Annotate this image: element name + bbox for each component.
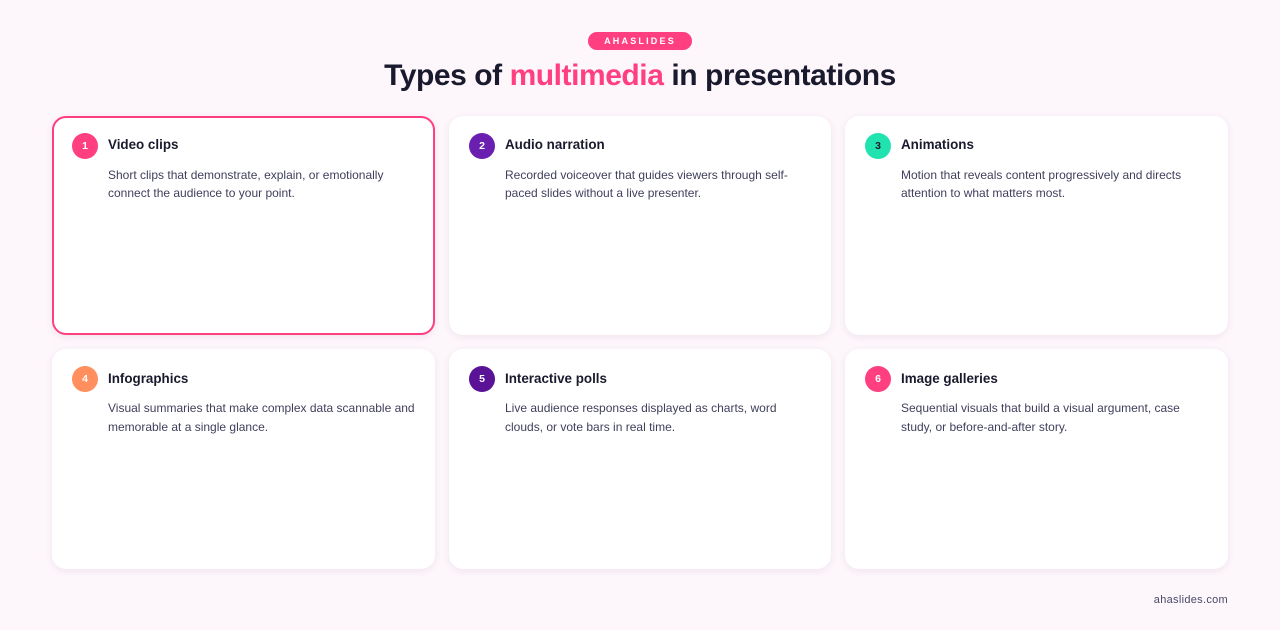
text: infographics description: Visual summaries that make complex data scannable and <box>108 400 415 414</box>
number badge 6 <box>865 366 891 392</box>
number badge 6: 6 <box>875 373 881 385</box>
panel: infographics <box>52 349 435 569</box>
number badge 5 <box>469 366 495 392</box>
heading: image galleries: Image galleries <box>901 371 998 386</box>
text: audio narration description: paced slides without a live presenter. <box>505 186 701 200</box>
text: image galleries description <box>901 400 1180 434</box>
heading: audio narration: Audio narration <box>505 137 605 152</box>
text: interactive polls description: clouds, or vote bars in real time. <box>505 420 675 434</box>
title: Types of multimedia in presentations <box>384 59 896 92</box>
text: image galleries description: study, or before-and-after story. <box>901 420 1067 434</box>
number badge 2 <box>469 133 495 159</box>
heading: animations: Animations <box>901 137 974 152</box>
panel: interactive polls <box>449 349 831 569</box>
text: video clips description: Short clips that demonstrate, explain, or emotionally <box>108 168 383 182</box>
footer: site name: ahaslides.com <box>1154 594 1228 606</box>
panel: video clips <box>52 116 435 335</box>
text: audio narration description <box>505 168 788 200</box>
text: interactive polls description <box>505 400 776 434</box>
number badge 4 <box>72 366 98 392</box>
number badge 1 <box>72 133 98 159</box>
panel: image galleries <box>845 349 1228 569</box>
heading: infographics: Infographics <box>108 371 188 386</box>
badge: AhaSlides: AHASLIDES <box>604 36 676 46</box>
number badge 3 <box>865 133 891 159</box>
badge: AhaSlides <box>588 32 692 50</box>
text: audio narration description: Recorded voiceover that guides viewers through self- <box>505 168 788 182</box>
text: image galleries description: Sequential visuals that build a visual argument, case <box>901 400 1180 414</box>
panel: audio narration <box>449 116 831 335</box>
text: interactive polls description: Live audience responses displayed as charts, word <box>505 400 776 414</box>
text: video clips description: connect the audience to your point. <box>108 186 295 200</box>
number badge 1: 1 <box>82 140 88 152</box>
text: animations description <box>901 168 1181 200</box>
text: animations description: Motion that reveals content progressively and directs <box>901 168 1181 182</box>
number badge 2: 2 <box>479 140 485 152</box>
number badge 5: 5 <box>479 373 485 385</box>
heading: interactive polls: Interactive polls <box>505 371 607 386</box>
text: infographics description: memorable at a single glance. <box>108 420 268 434</box>
number badge 4: 4 <box>82 373 88 385</box>
text: animations description: attention to what matters most. <box>901 186 1065 200</box>
heading: video clips: Video clips <box>108 137 178 152</box>
number badge 3: 3 <box>875 140 881 152</box>
panel: animations <box>845 116 1228 335</box>
text: infographics description <box>108 400 415 434</box>
text: video clips description <box>108 168 384 200</box>
